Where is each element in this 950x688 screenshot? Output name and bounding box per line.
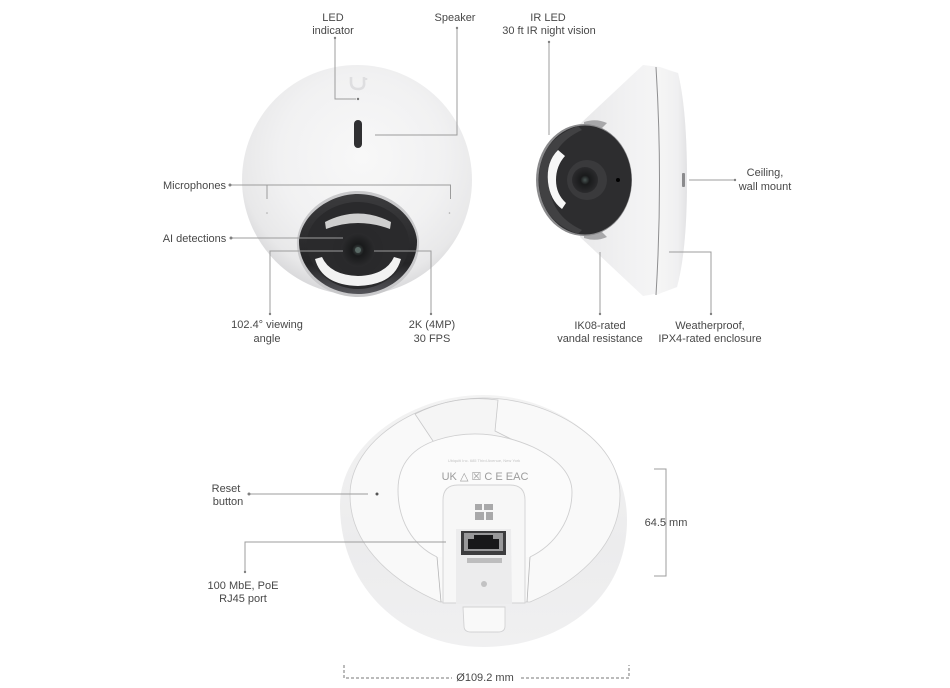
callout: LED indicator: [312, 12, 356, 99]
dome lens housing: [297, 191, 419, 297]
callout: viewing angle: angle: [254, 333, 280, 345]
callout: mount: [689, 167, 791, 193]
speaker slot: [354, 120, 362, 148]
callout: resolution: 30 FPS: [414, 333, 450, 345]
callout: LED indicator: LED: [322, 12, 344, 24]
dimension: height: [645, 469, 687, 576]
callout: IK08: IK08-rated: [574, 320, 626, 332]
inner ring: [398, 434, 572, 557]
callout: IPX4: Weatherproof,: [675, 320, 745, 332]
product: camera side view: [536, 65, 687, 296]
icon: logo: [351, 77, 366, 89]
callout: Microphones: Microphones: [163, 180, 226, 192]
callout: IK08: [557, 252, 643, 345]
mount tab: [443, 485, 525, 603]
LED dot: [357, 98, 359, 100]
callout: IR LED: [502, 12, 596, 135]
callout: reset: Reset: [212, 483, 240, 495]
callout: reset: [212, 483, 368, 508]
callout: Microphones: [163, 180, 450, 199]
callout: viewing angle: 102.4° viewing: [231, 319, 303, 331]
callout: resolution: 2K (4MP): [409, 319, 455, 331]
product: camera back view: [340, 395, 627, 647]
RJ45 port: [461, 531, 506, 555]
callout: RJ45: 100 MbE, PoE: [208, 580, 278, 592]
side port: [682, 173, 685, 187]
regulatory marks: UK △ ☒ C E EAC: [442, 471, 528, 483]
callout: LED indicator: indicator: [312, 25, 354, 37]
fine print: Ubiquiti Inc. 685 Third Avenue, New York: [448, 458, 520, 463]
dome lens: [536, 120, 632, 240]
callout: AI detections: AI detections: [163, 233, 227, 245]
dimension: diameter: Ø109.2 mm: [456, 672, 514, 684]
callout: mount: Ceiling,: [747, 167, 783, 179]
notch: [415, 399, 533, 450]
callout: IR LED: IR LED: [530, 12, 566, 24]
callout: IPX4: IPX4-rated enclosure: [658, 333, 762, 345]
clip: [463, 607, 505, 632]
callout: IR LED: 30 ft IR night vision: [502, 25, 596, 37]
callout: AI detections: [163, 233, 343, 245]
callout: Speaker: Speaker: [435, 12, 476, 24]
callout: viewing angle: [231, 251, 343, 345]
callout: mount: wall mount: [738, 181, 791, 193]
callout: RJ45: [208, 542, 446, 605]
dimension: diameter: [344, 665, 629, 686]
callout: Speaker: [375, 12, 476, 135]
port recess: [456, 529, 512, 604]
callout: RJ45: RJ45 port: [219, 593, 267, 605]
callout: IPX4: [658, 252, 762, 345]
callout: reset: button: [213, 496, 243, 508]
reset hole: [376, 492, 378, 496]
callout: resolution: [374, 251, 455, 345]
product: camera front view: [242, 65, 472, 297]
microphone holes: [266, 212, 268, 214]
callout: IK08: vandal resistance: [557, 333, 643, 345]
dimension: height: 64.5 mm: [645, 517, 687, 529]
QR label: [475, 504, 493, 520]
